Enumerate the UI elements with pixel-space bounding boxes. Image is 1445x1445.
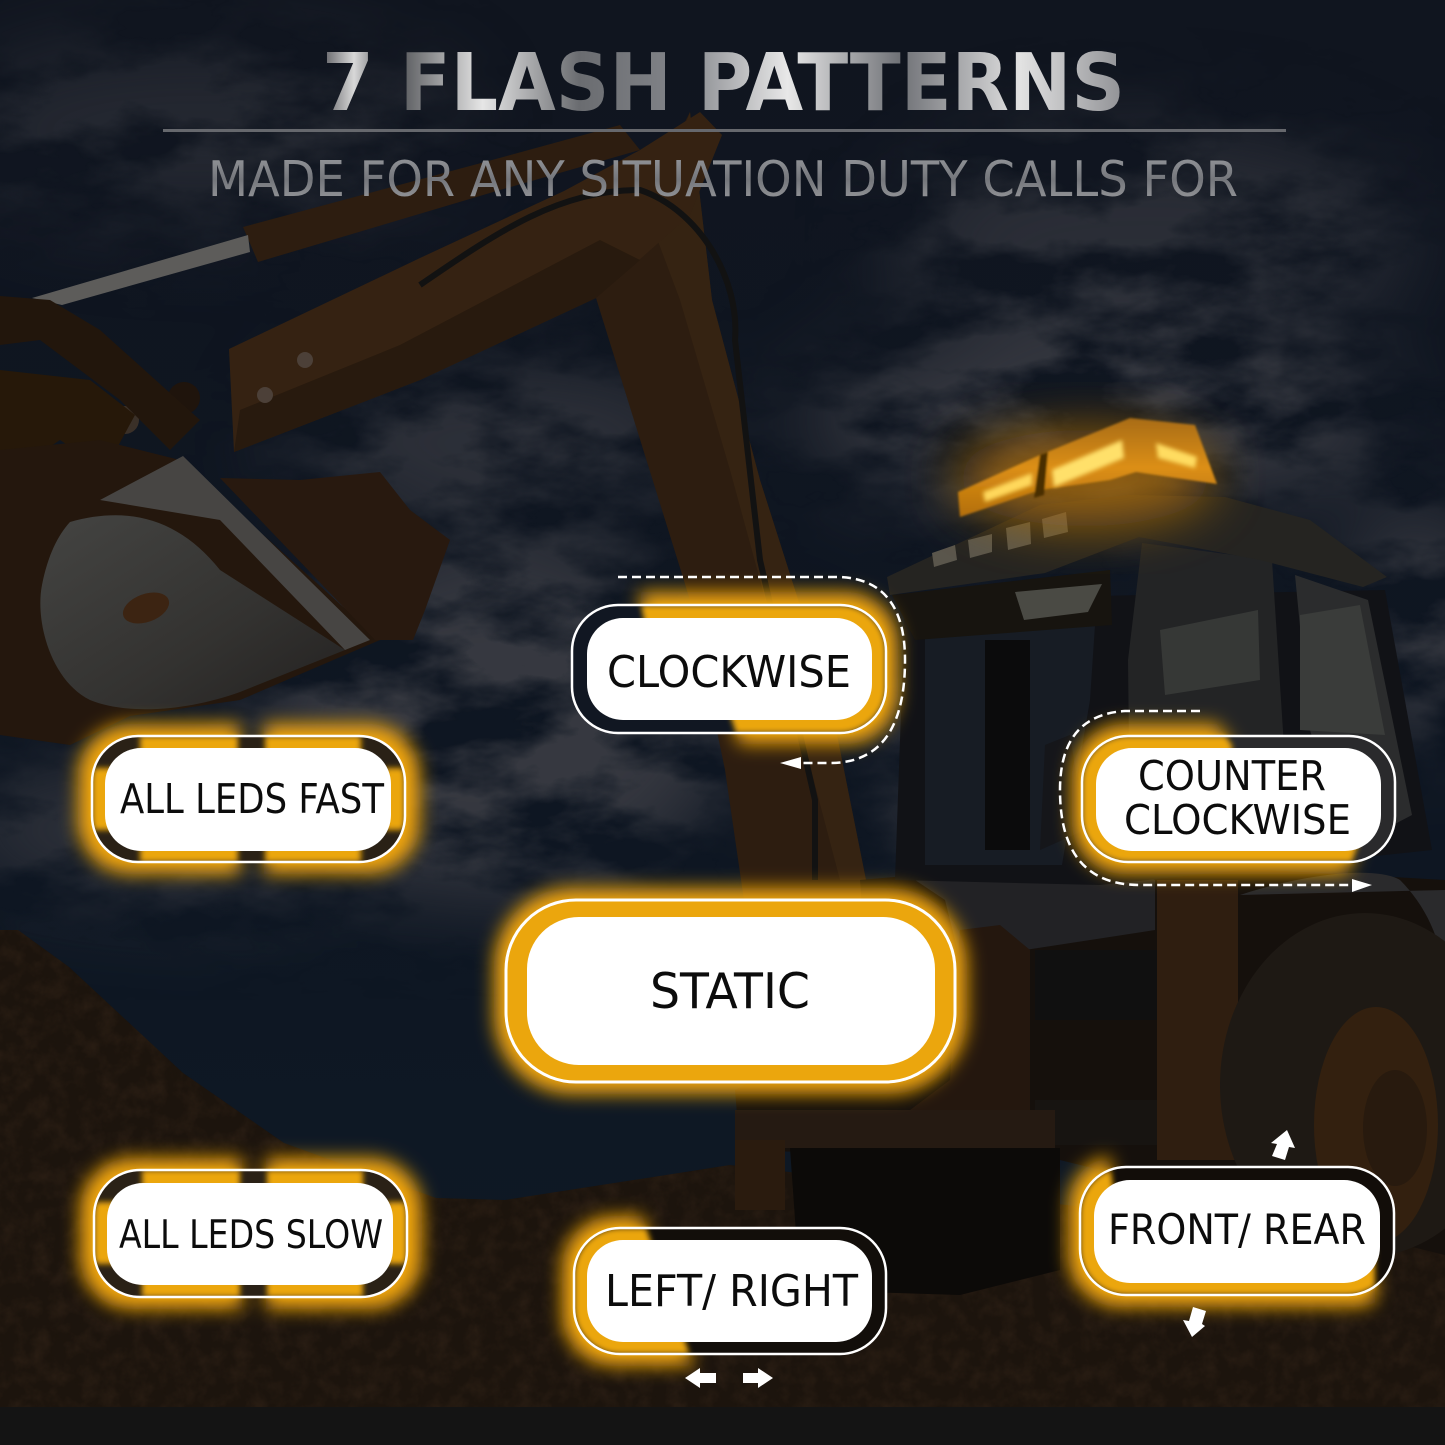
- pattern: front/rear: [1068, 1155, 1406, 1307]
- label: all leds fast: ALL LEDS FAST: [120, 775, 385, 823]
- arrow: up: [1271, 1130, 1295, 1160]
- chassis: [900, 855, 1155, 960]
- label: clockwise: CLOCKWISE: [607, 647, 851, 698]
- right window: [1295, 575, 1412, 850]
- work lights: [932, 512, 1068, 567]
- label: all leds slow: ALL LEDS SLOW: [119, 1213, 383, 1258]
- pattern: all leds fast: [78, 724, 420, 874]
- tractor body: [735, 860, 1445, 1255]
- arrow: right: [743, 1368, 773, 1388]
- linkage: [0, 296, 200, 450]
- bucket dark body: [0, 440, 380, 745]
- pattern: all leds slow: [80, 1158, 422, 1309]
- title divider: [163, 129, 1286, 132]
- clouds: [0, 46, 1445, 929]
- fender: [1240, 873, 1445, 990]
- cab: [895, 590, 1432, 885]
- bottom strip: [0, 1407, 1445, 1445]
- label: left/right: LEFT/ RIGHT: [605, 1266, 858, 1317]
- pattern: static: [494, 888, 967, 1094]
- boom: [596, 112, 866, 1010]
- dirt in bucket: [220, 472, 450, 640]
- left window: [925, 625, 1095, 865]
- cab roof underside: [892, 570, 1112, 640]
- arrow: clockwise dashed path: [618, 577, 905, 769]
- cab roof: [887, 495, 1387, 595]
- label: front/rear: FRONT/ REAR: [1108, 1205, 1366, 1254]
- amber LED light bar on cab roof: [955, 418, 1217, 526]
- bucket light side plate: [40, 515, 345, 709]
- shadow under machine: [790, 1148, 1060, 1295]
- dirt mound and ground: [0, 930, 1445, 1407]
- center window: [1128, 543, 1290, 840]
- dipper arm: [229, 112, 722, 452]
- hydraulic cylinder and rod: [243, 125, 640, 262]
- pattern: counter clockwise: [1072, 724, 1406, 874]
- hoses: [420, 190, 815, 880]
- label: counter clockwise: COUNTER: [1138, 752, 1326, 800]
- arrow: down: [1183, 1307, 1206, 1337]
- subtitle: MADE FOR ANY SITUATION DUTY CALLS FOR: [208, 151, 1238, 208]
- label: static: STATIC: [650, 963, 810, 1020]
- arrow: left: [685, 1368, 716, 1388]
- rear wheel: [1220, 913, 1445, 1257]
- label: counter clockwise: CLOCKWISE: [1124, 796, 1351, 844]
- pattern: clockwise: [572, 592, 898, 744]
- title: 7 FLASH PATTERNS: [322, 37, 1125, 129]
- arrow: counter clockwise dashed path: [1060, 711, 1372, 892]
- pattern: left/right: [562, 1216, 898, 1366]
